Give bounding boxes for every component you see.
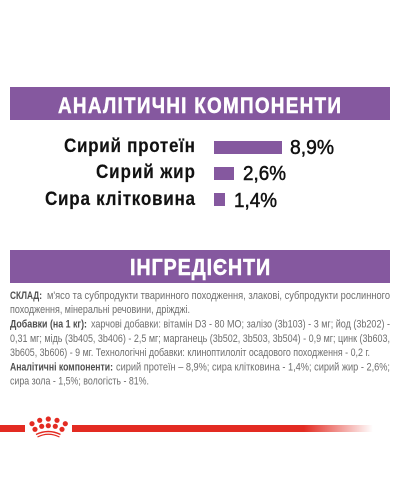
bar chart: analytical components [45,135,334,212]
heading band: ingredients [10,250,390,283]
heading band: analytical components [10,87,390,120]
ingredients text block [10,290,390,388]
row: crude protein: 8,9% [290,137,334,159]
footer line: left segment [0,425,25,432]
ingredients text block: СКЛАД: [10,290,42,302]
row: crude fibre [45,188,277,212]
ingredients text block: Аналітичні компоненти: [10,361,113,373]
row: crude protein: Сирий протеїн [64,135,195,156]
ingredients text block: сира зола - 1,5%; вологість - 81%. [10,376,149,388]
footer line: right fading segment [72,425,373,432]
row: crude fat: 2,6% [243,163,286,185]
row: crude fat [96,161,286,185]
row: crude fat: Сирий жир [96,161,195,182]
heading band: ingredients: ІНГРЕДІЄНТИ [130,255,270,280]
ingredients text block: походження, мінеральні речовини, дріжджі. [10,304,190,316]
row: crude fibre: 1,4% [234,190,277,212]
row: crude fibre: Сира клітковина [45,188,196,209]
ingredients text block: Добавки (на 1 кг): [10,318,87,330]
heading band: analytical components: АНАЛІТИЧНІ КОМПОНЕНТИ [58,94,341,118]
icon: royal crown logo [29,416,68,437]
row: crude protein [64,135,334,159]
